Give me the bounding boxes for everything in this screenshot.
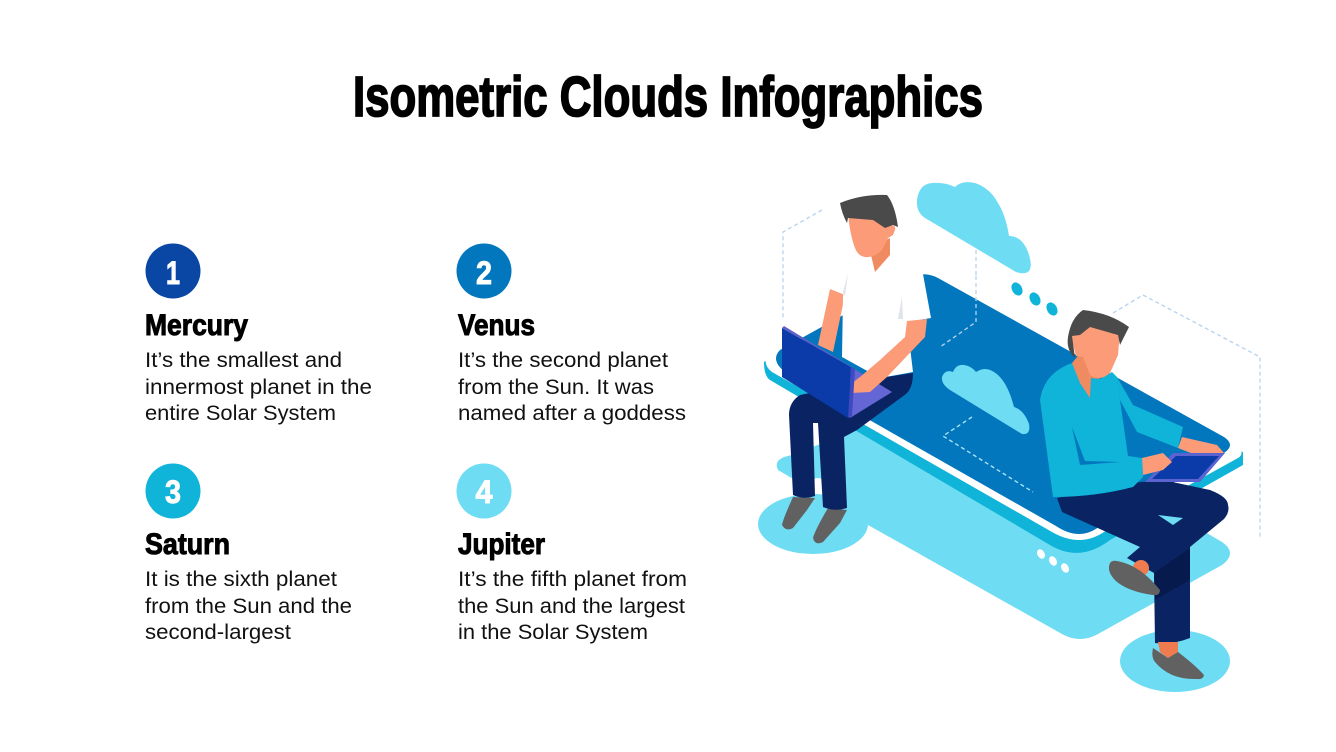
title: Isometric Clouds Infographics xyxy=(353,65,983,129)
text: Venus description: It’s the second planet xyxy=(458,347,668,372)
ankle crossed xyxy=(1133,560,1149,576)
hair xyxy=(1068,310,1129,358)
cloud large xyxy=(917,182,1031,273)
teal slab edge xyxy=(764,340,1243,553)
number badge 1 xyxy=(146,244,200,298)
shoe crossed xyxy=(1109,561,1160,595)
text: Mercury description: It’s the smallest and xyxy=(145,347,342,372)
heading: Venus: Venus xyxy=(458,309,535,342)
text: Saturn description: from the Sun and the xyxy=(145,593,352,618)
neck xyxy=(866,238,890,272)
text: Saturn description: second-largest xyxy=(145,619,291,644)
near hand xyxy=(1142,453,1172,475)
number badge 3: 3 xyxy=(165,474,181,510)
laptop xyxy=(782,319,927,418)
text: Venus description: named after a goddess xyxy=(458,400,686,425)
near arm xyxy=(852,319,927,393)
face xyxy=(848,210,895,257)
text: Saturn description: It is the sixth planet xyxy=(145,566,337,591)
trousers xyxy=(789,373,913,510)
text: Mercury description: innermost planet in the xyxy=(145,374,372,399)
hair xyxy=(840,195,898,228)
shoe lower xyxy=(1152,648,1204,679)
lower platform xyxy=(777,400,1230,639)
far hand xyxy=(1178,437,1224,463)
number badge 3 xyxy=(146,464,200,518)
dark blue slab top xyxy=(776,274,1230,534)
shirt xyxy=(1040,363,1143,497)
white shirt xyxy=(842,255,931,378)
number badge 4 xyxy=(456,464,512,518)
panel: Saturn xyxy=(145,464,352,644)
neck xyxy=(1072,350,1100,398)
white dots on platform xyxy=(1035,548,1071,574)
number badge 2 xyxy=(456,244,512,298)
person right xyxy=(1040,310,1228,679)
panel: Jupiter xyxy=(456,464,687,644)
dashed hexagon outlines behind xyxy=(783,210,1260,538)
white slab layer xyxy=(766,272,1242,540)
dashed lines on slab xyxy=(940,276,1033,492)
text: Saturn description xyxy=(145,566,352,644)
number badge 2: 2 xyxy=(476,255,492,291)
text: Jupiter description xyxy=(458,566,687,644)
text: Venus description xyxy=(458,347,686,425)
trousers xyxy=(1057,480,1228,643)
number badge 1: 1 xyxy=(166,255,180,291)
shirt crease xyxy=(1072,427,1120,465)
knee gap xyxy=(1158,515,1183,525)
heading: Mercury: Mercury xyxy=(145,309,248,342)
far arm xyxy=(818,289,845,352)
cloud small xyxy=(942,365,1029,434)
text: Jupiter description: in the Solar System xyxy=(458,619,648,644)
three teal dots xyxy=(1009,280,1060,318)
tablet xyxy=(1145,453,1225,482)
heading: Saturn: Saturn xyxy=(145,528,230,561)
ankle lower xyxy=(1158,642,1178,658)
number badge 4: 4 xyxy=(476,474,493,510)
face xyxy=(1071,320,1120,378)
foot shadow left xyxy=(758,494,868,554)
person left xyxy=(782,195,931,543)
text: Mercury description xyxy=(145,347,372,425)
trouser shadow xyxy=(1154,548,1190,600)
text: Mercury description: entire Solar System xyxy=(145,400,336,425)
panel: Venus xyxy=(456,244,686,425)
heading: Jupiter: Jupiter xyxy=(458,528,545,561)
foot shadow right xyxy=(1120,630,1230,692)
illustration: isometric cloud platform with two people xyxy=(758,182,1260,692)
panel: Mercury xyxy=(145,244,372,425)
text: Jupiter description: the Sun and the largest xyxy=(458,593,685,618)
text: Jupiter description: It’s the fifth planet from xyxy=(458,566,687,591)
far arm xyxy=(1117,377,1183,448)
text: Venus description: from the Sun. It was xyxy=(458,374,654,399)
shirt shading xyxy=(843,273,903,319)
shoes xyxy=(782,497,847,543)
